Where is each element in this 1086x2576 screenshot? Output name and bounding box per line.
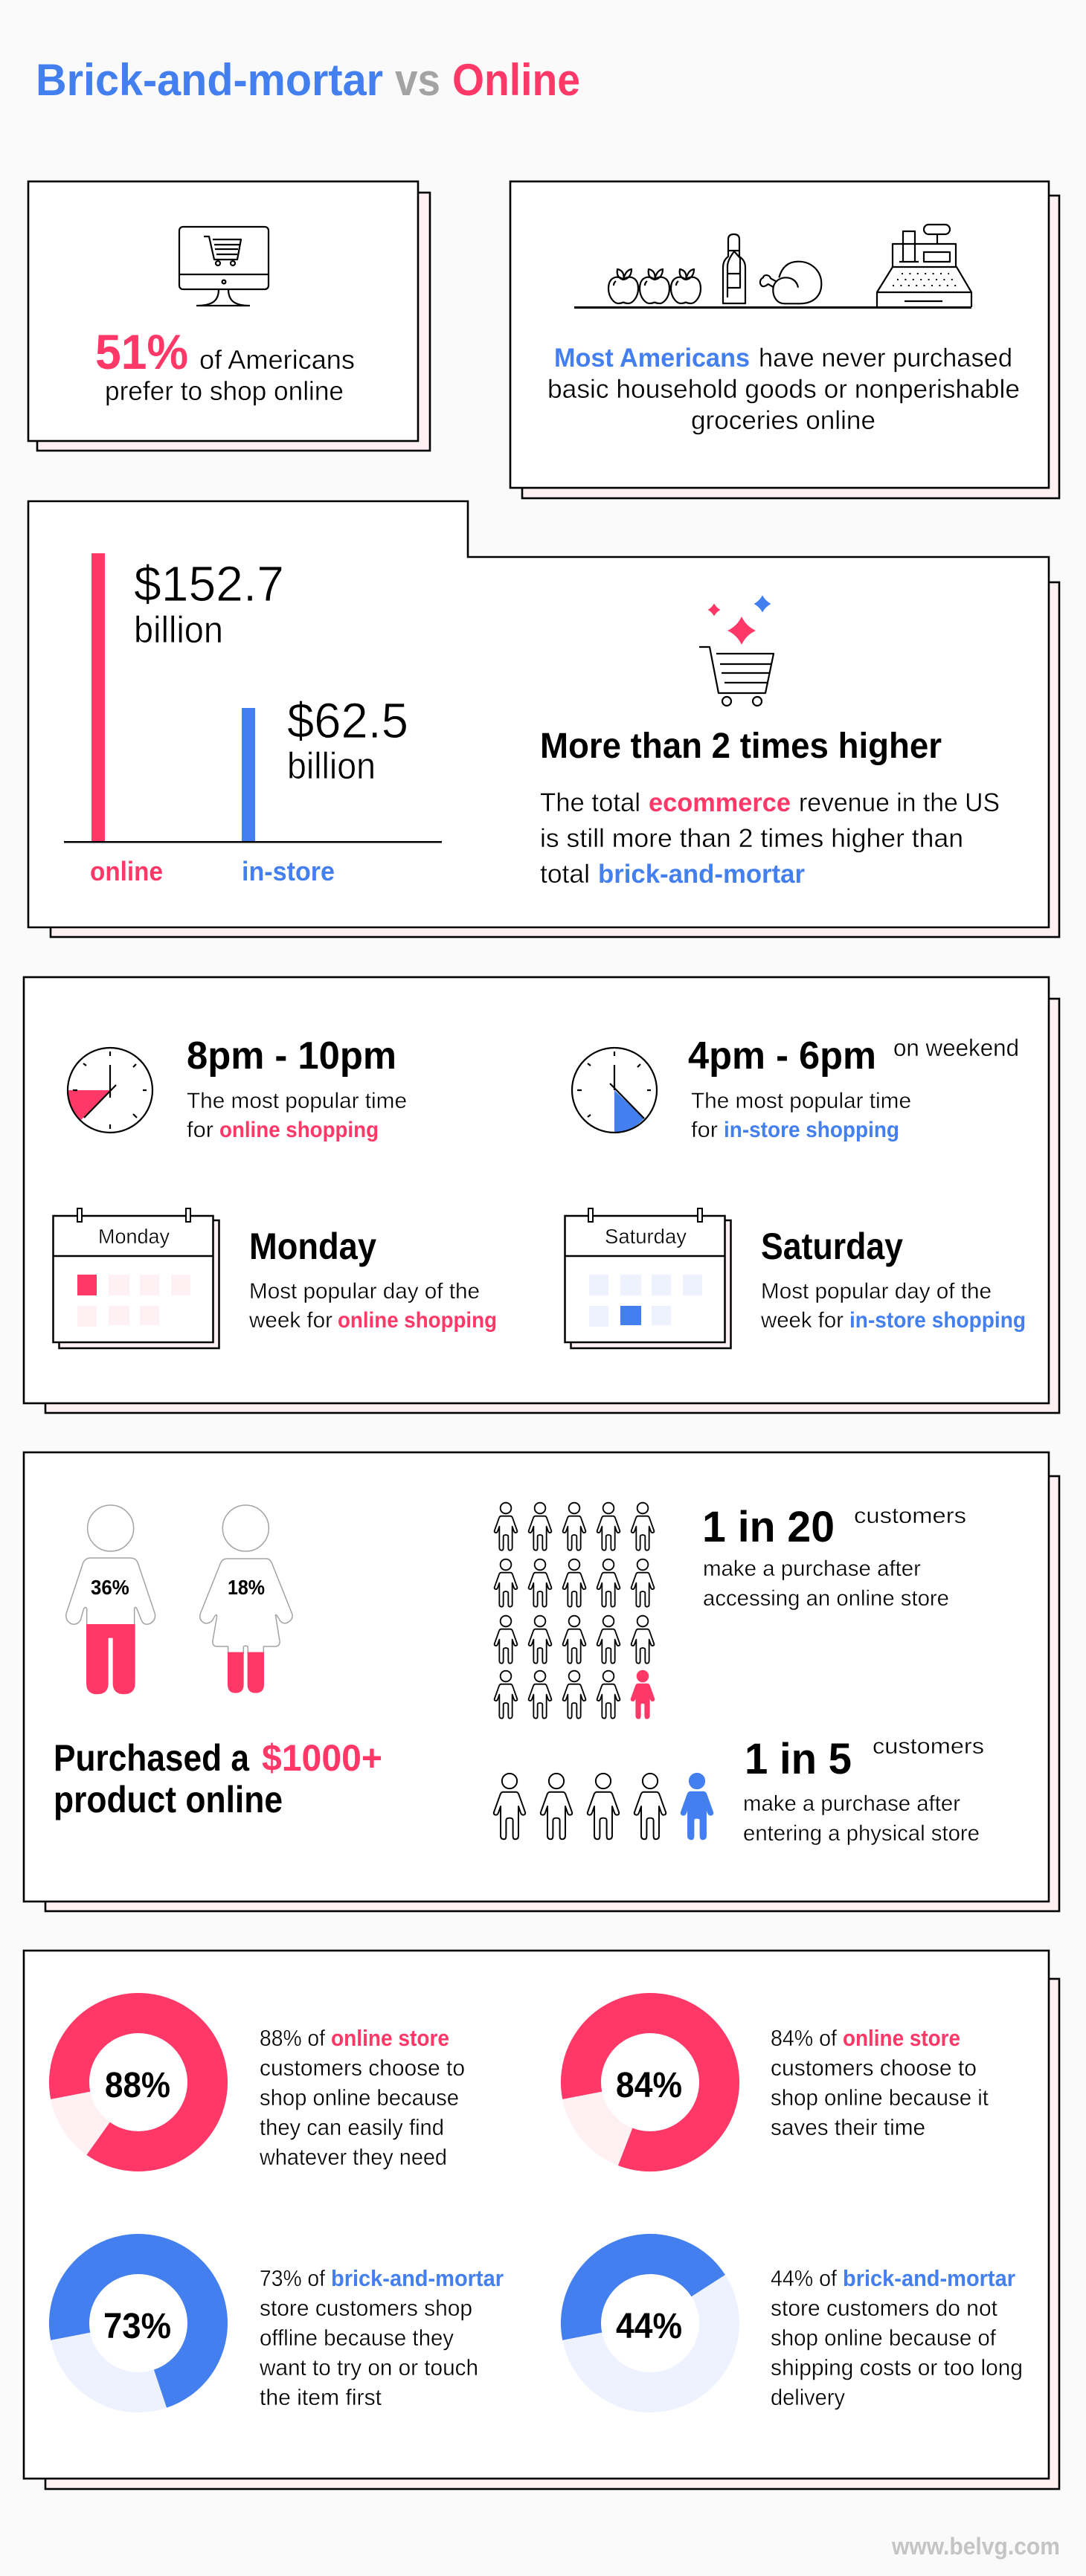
text: 1 in 20 customers: accessing an online store: [703, 1586, 949, 1611]
text: 51% of Americans: 51%: [95, 324, 188, 379]
text: 73% reason: the item first: [260, 2384, 382, 2410]
panel: purchases and conversion: [24, 1452, 1059, 1911]
text: Monday: Most popular day of the: [249, 1279, 480, 1304]
text: 1 in 20 customers: [702, 1503, 966, 1611]
text: 44% reason: [771, 2265, 1023, 2410]
title: [36, 55, 580, 105]
text: 51% of Americans: [95, 324, 355, 406]
text: 4pm - 6pm: 4pm - 6pm: [688, 1034, 876, 1078]
bar chart: revenue online vs in-store: online: [90, 856, 163, 886]
bar chart: revenue online vs in-store: in-store: [242, 856, 335, 886]
icon: woman 18%: 18%: [228, 1576, 265, 1599]
text: 84% reason: customers choose to: [771, 2055, 977, 2081]
text: 73% reason: brick-and-mortar: [331, 2265, 504, 2291]
text: 73% reason: store customers shop: [260, 2295, 472, 2321]
text: Saturday: Most popular day of the: [761, 1279, 992, 1304]
bar chart: revenue online vs in-store: $62.5: [287, 693, 408, 749]
text: 1 in 20 customers: 1 in 20: [702, 1503, 835, 1551]
text: 1 in 20 customers: make a purchase after: [703, 1556, 921, 1581]
text: 73% reason: offline because they: [260, 2325, 454, 2351]
icon: calendar Monday: [53, 1208, 219, 1348]
text: 88% reason: online store: [331, 2025, 449, 2051]
donut chart: 44%: 44%: [616, 2307, 682, 2346]
text: purchased a $1000+ product online: $1000+: [262, 1737, 382, 1779]
text: purchased a $1000+ product online: Purchased a: [54, 1737, 250, 1779]
text: Saturday: week for: [760, 1308, 844, 1333]
bar chart: revenue online vs in-store: [64, 553, 442, 886]
heading: more than 2 times higher: More than 2 times higher: [540, 727, 942, 766]
text: 73% reason: want to try on or touch: [259, 2354, 478, 2380]
icon: man 36%: 36%: [91, 1576, 129, 1599]
text: 4pm - 6pm: in-store shopping: [724, 1118, 899, 1142]
text: Saturday: [760, 1226, 1026, 1333]
text: 44% reason: shipping costs or too long: [771, 2354, 1023, 2380]
text: most Americans statement: have never purchased: [759, 344, 1012, 373]
donut chart: 88%: 88%: [105, 2066, 170, 2105]
icon: shelf with groceries and cash register: [574, 225, 971, 308]
text: 44% reason: brick-and-mortar: [843, 2265, 1015, 2291]
panel: most Americans never purchased: [510, 181, 1059, 498]
text: 1 in 5 customers: make a purchase after: [743, 1791, 960, 1816]
text: most Americans statement: [547, 344, 1020, 435]
text: 88% reason: 88% of: [260, 2025, 325, 2051]
icon: man 36%: [66, 1505, 155, 1694]
donut chart: 84%: 84%: [616, 2066, 682, 2105]
text: 44% reason: delivery: [771, 2384, 845, 2410]
text: 88% reason: customers choose to: [260, 2055, 465, 2081]
icon: woman 18%: [200, 1505, 292, 1693]
text: 1 in 5 customers: 1 in 5: [745, 1735, 852, 1783]
text: 88% reason: whatever they need: [259, 2144, 447, 2170]
text: 1 in 5 customers: customers: [873, 1734, 984, 1759]
title: Online: [452, 55, 580, 105]
text: Saturday: Saturday: [761, 1226, 903, 1267]
text: 44% reason: 44% of: [771, 2265, 837, 2291]
text: 4pm - 6pm: on weekend: [893, 1034, 1019, 1061]
text: 88% reason: they can easily find: [260, 2114, 444, 2140]
text: Saturday: in-store shopping: [849, 1308, 1026, 1333]
text: 73% reason: [259, 2265, 504, 2410]
icon: clock in-store: [572, 1048, 657, 1133]
text: 1 in 5 customers: entering a physical store: [743, 1821, 980, 1846]
text: 88% reason: shop online because: [260, 2084, 459, 2110]
donut chart: 73%: [57, 2242, 219, 2404]
text: 84% reason: online store: [843, 2025, 960, 2051]
icon: calendar Monday: Monday: [98, 1225, 170, 1248]
text: most Americans statement: groceries online: [691, 406, 875, 435]
pictogram: 1 in 5 customers: [494, 1774, 713, 1839]
bar chart: revenue online vs in-store: $152.7: [134, 556, 284, 612]
text: 84% reason: shop online because it: [771, 2084, 989, 2110]
bar chart: revenue online vs in-store: billion: [134, 609, 223, 651]
text: 8pm - 10pm: online shopping: [219, 1118, 379, 1142]
text: 51% of Americans: of Americans: [199, 344, 355, 375]
text: Monday: Monday: [249, 1226, 376, 1267]
text: purchased a $1000+ product online: [54, 1737, 382, 1820]
text: revenue explanation: total: [540, 860, 590, 889]
text: 44% reason: store customers do not: [771, 2295, 997, 2321]
text: 1 in 20 customers: customers: [854, 1504, 966, 1528]
text: 73% reason: 73% of: [260, 2265, 325, 2291]
icon: computer with cart: [179, 227, 269, 306]
text: revenue explanation: revenue in the US: [799, 788, 1000, 817]
title: vs: [395, 55, 440, 105]
icon: calendar Saturday: [565, 1208, 730, 1348]
icon: calendar Saturday: Saturday: [605, 1225, 687, 1248]
text: most Americans statement: basic household goods or nonperishable: [547, 375, 1020, 404]
pictogram: 1 in 20 customers: [495, 1503, 654, 1719]
text: 88% reason: [259, 2025, 465, 2170]
text: revenue explanation: is still more than 2 times higher than: [540, 824, 963, 853]
text: 8pm - 10pm: for: [187, 1118, 213, 1142]
text: most Americans statement: Most Americans: [554, 344, 750, 373]
text: 84% reason: [771, 2025, 989, 2140]
text: Monday: [248, 1226, 497, 1333]
text: revenue explanation: brick-and-mortar: [598, 860, 805, 889]
text: 84% reason: saves their time: [771, 2114, 925, 2140]
text: 51% of Americans: prefer to shop online: [105, 376, 344, 406]
panel: 51% prefer online: [28, 181, 430, 451]
donut chart: 88%: [57, 2001, 219, 2163]
text: 4pm - 6pm: The most popular time: [691, 1089, 911, 1113]
text: revenue explanation: [540, 788, 1000, 889]
panel: ecommerce revenue: [28, 501, 1059, 937]
panel: popular times and days: [24, 977, 1059, 1413]
text: 4pm - 6pm: [688, 1034, 1019, 1142]
icon: clock online: [68, 1048, 152, 1133]
panel: reasons donut charts: [24, 1951, 1059, 2489]
title: Brick-and-mortar: [36, 55, 383, 105]
text: 8pm - 10pm: [187, 1034, 407, 1142]
icon: cart with sparkles: [699, 595, 774, 706]
text: revenue explanation: ecommerce: [649, 788, 791, 817]
text: 1 in 5 customers: [743, 1734, 984, 1846]
text: 84% reason: 84% of: [771, 2025, 837, 2051]
text: revenue explanation: The total: [540, 788, 640, 817]
text: 4pm - 6pm: for: [691, 1118, 718, 1142]
text: purchased a $1000+ product online: product online: [54, 1779, 283, 1820]
donut chart: 84%: [569, 2001, 731, 2163]
donut chart: 73%: 73%: [103, 2307, 171, 2346]
bar chart: revenue online vs in-store: billion: [287, 745, 376, 787]
text: 8pm - 10pm: 8pm - 10pm: [187, 1034, 396, 1078]
text: 8pm - 10pm: The most popular time: [187, 1089, 407, 1113]
footer: website: www.belvg.com: [891, 2533, 1060, 2560]
donut chart: 44%: [569, 2242, 731, 2404]
text: Monday: week for: [248, 1308, 332, 1333]
text: 44% reason: shop online because of: [771, 2325, 996, 2351]
text: Monday: online shopping: [338, 1308, 497, 1333]
